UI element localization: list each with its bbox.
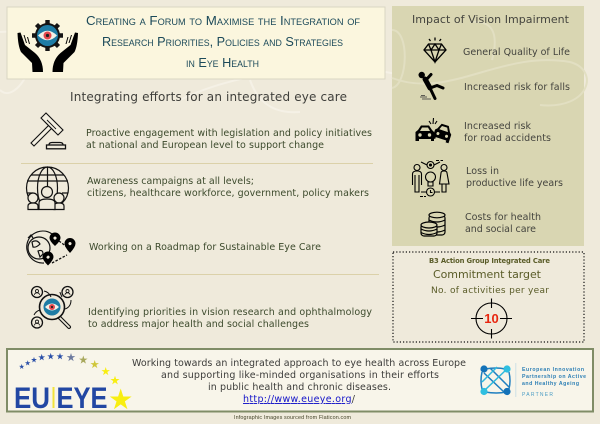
title text: in Eye Health: [186, 55, 259, 70]
icon: hands holding gear with eye: [18, 20, 78, 72]
icon: gavel: [31, 113, 66, 149]
title text: Research Priorities, Policies and Strategies: [102, 34, 343, 49]
text: footer statement: in public health and chronic diseases.: [208, 382, 391, 393]
text: awareness: [87, 176, 369, 199]
icon: people, bulb, gear, clock: [412, 160, 449, 196]
text: awareness: Awareness campaigns at all levels;: [87, 176, 254, 187]
title text: [86, 13, 360, 70]
item: costs: [421, 212, 541, 236]
text: costs: Costs for health: [465, 212, 541, 223]
text: activities per year: No. of activities per year: [431, 286, 549, 296]
text: road accidents: for road accidents: [464, 133, 551, 144]
item: quality of life: [424, 38, 570, 62]
text: productive life years: Loss in: [466, 166, 499, 177]
text: priorities: [88, 307, 372, 330]
icon: globe with people: [26, 167, 68, 210]
icon: coins: [421, 212, 445, 236]
text: footer statement: Working towards an integrated approach to eye health across Europe: [132, 358, 466, 369]
logo: European Innovation Partnership: Partnership on Active: [522, 374, 586, 380]
item: productive life years: [412, 160, 563, 196]
text: road accidents: Increased risk: [464, 121, 531, 132]
text: awareness: citizens, healthcare workforce, government, policy makers: [87, 188, 369, 199]
text: legislation: Proactive engagement with legislation and policy initiatives: [86, 128, 372, 139]
heading: impact: Impact of Vision Impairment: [412, 13, 570, 26]
text: costs: [465, 212, 541, 235]
logo: European Innovation Partnership: European Innovation: [522, 367, 584, 373]
text: priorities: to address major health and social challenges: [88, 319, 309, 330]
panel: footer: [7, 349, 593, 415]
heading: integrating efforts: Integrating efforts for an integrated eye care: [70, 90, 347, 104]
panel: title banner: [7, 7, 385, 79]
text: road accidents: [464, 121, 551, 144]
text: productive life years: [466, 166, 563, 189]
text: action group: B3 Action Group Integrated Care: [429, 257, 550, 265]
icon: globe with map pins: [27, 231, 76, 266]
panel: impact of vision impairment: [392, 6, 587, 246]
icon: car crash: [416, 118, 454, 143]
text: priorities: Identifying priorities in vision research and ophthalmology: [88, 307, 372, 318]
text: footer statement: http://www.eueye.org/: [243, 394, 356, 405]
logo: European Innovation Partnership: [480, 363, 586, 398]
text: falls: Increased risk for falls: [464, 82, 570, 93]
logo: EU EYE: EYE: [56, 382, 108, 415]
logo: European Innovation Partnership: PARTNER: [522, 392, 553, 398]
text: quality of life: General Quality of Life: [463, 47, 570, 58]
icon: target with number 10: [471, 298, 512, 338]
item: road accidents: [416, 118, 551, 144]
item: falls: [418, 72, 570, 99]
logo: EU EYE: EU: [14, 382, 50, 415]
text: commitment target: Commitment target: [433, 268, 542, 281]
icon: target with number 10: 10: [484, 311, 499, 326]
text: productive life years: productive life years: [466, 178, 563, 189]
text: footer statement: [132, 358, 466, 405]
row: roadmap: [27, 231, 321, 266]
panel: commitment target: [393, 252, 584, 342]
text: roadmap: Working on a Roadmap for Sustainable Eye Care: [89, 242, 321, 253]
title text: Creating a Forum to Maximise the Integration of: [86, 13, 360, 28]
row: priorities: [32, 286, 372, 330]
text: legislation: [86, 128, 372, 151]
row: legislation: [31, 113, 372, 151]
text: image credit: Infographic Images sourced from Flaticon.com: [234, 415, 352, 421]
text: costs: and social care: [465, 224, 536, 235]
text: legislation: at national and European level to support change: [86, 140, 324, 151]
icon: falling person: [418, 72, 443, 99]
logo: European Innovation Partnership: and Healthy Ageing: [522, 381, 579, 387]
icon: magnifier with eye and people: [32, 286, 73, 328]
text: footer statement: and supporting like-minded organisations in their efforts: [161, 370, 439, 381]
logo: EU EYE: [14, 353, 132, 415]
row: awareness: [26, 167, 369, 210]
icon: diamond: [424, 38, 446, 62]
